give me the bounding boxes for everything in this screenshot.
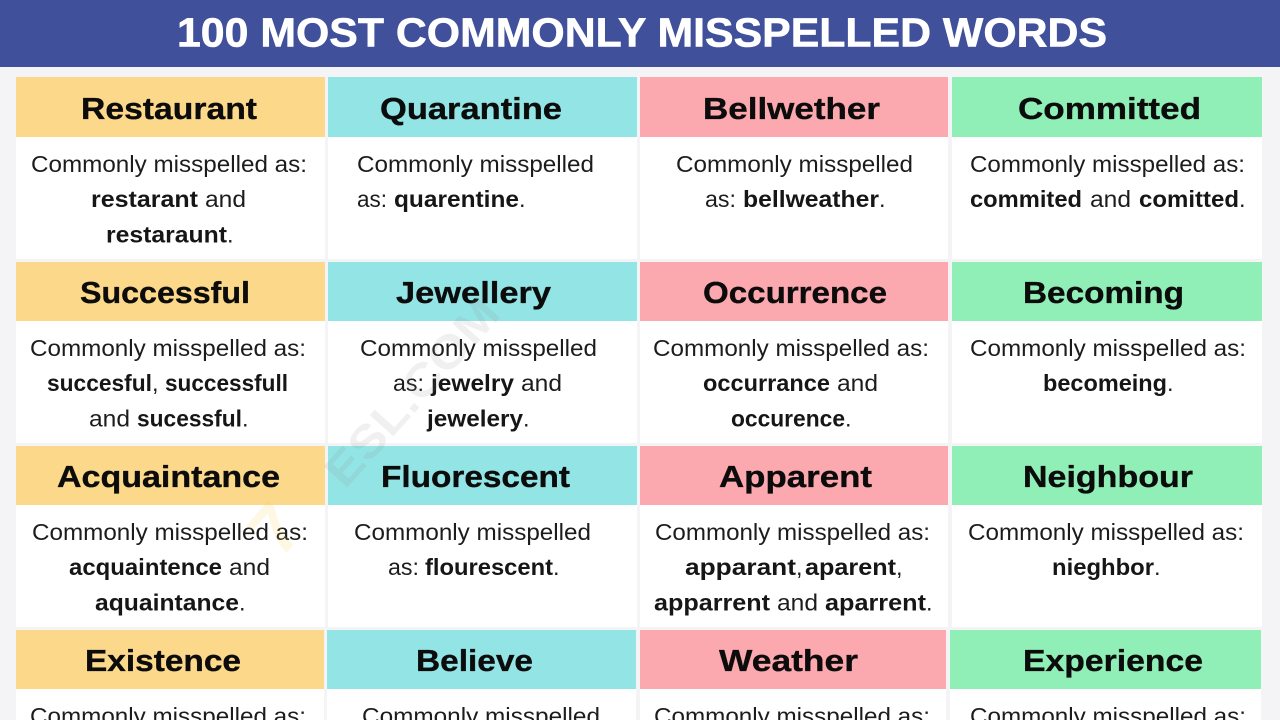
text: Apparent misspellings: . xyxy=(926,590,933,616)
text: Apparent misspellings: aparent xyxy=(805,554,896,580)
text: Bellwether misspellings xyxy=(676,151,913,212)
card: Apparent xyxy=(640,446,948,627)
text: Successful misspellings: successfull xyxy=(165,370,288,396)
text: Successful misspellings: sucessful xyxy=(137,406,242,432)
text: Neighbour misspellings: Commonly misspelled as: xyxy=(968,519,1244,545)
text: Successful misspellings: succesful xyxy=(47,370,152,396)
text: Successful misspellings: and xyxy=(89,406,130,432)
text: Quarantine misspellings xyxy=(357,151,594,212)
text: Quarantine misspellings: . xyxy=(519,186,526,212)
text: Successful misspellings: . xyxy=(242,406,249,432)
text: Neighbour misspellings xyxy=(968,519,1244,580)
text: Quarantine misspellings: Commonly misspelled xyxy=(357,151,594,177)
text: Jewellery misspellings: and xyxy=(521,370,562,396)
text: Committed misspellings: . xyxy=(1239,186,1246,212)
text: Fluorescent misspellings: as: xyxy=(388,554,419,580)
text: Apparent misspellings xyxy=(654,519,933,616)
text: Occurrence misspellings xyxy=(653,335,929,432)
text: Committed misspellings xyxy=(970,151,1246,212)
text: Acquaintance misspellings xyxy=(32,519,308,616)
heading: Successful: Successful xyxy=(80,275,250,310)
text: Acquaintance misspellings: acquaintence xyxy=(69,554,222,580)
text: Quarantine misspellings: quarentine xyxy=(394,186,519,212)
text: Successful misspellings xyxy=(30,335,306,432)
watermark xyxy=(233,287,510,570)
text: Acquaintance misspellings: aquaintance xyxy=(95,590,239,616)
heading: Becoming: Becoming xyxy=(1023,275,1184,310)
text: Neighbour misspellings: nieghbor xyxy=(1052,554,1154,580)
heading: Fluorescent: Fluorescent xyxy=(381,459,570,494)
text: Becoming misspellings: Commonly misspelled as: xyxy=(970,335,1246,361)
text: Restaurant misspellings: and xyxy=(205,186,246,212)
text: Restaurant misspellings: Commonly misspelled as: xyxy=(31,151,307,177)
card: Successful xyxy=(16,262,325,443)
text: Committed misspellings: and xyxy=(1090,186,1131,212)
title banner xyxy=(0,0,1280,67)
text: Occurrence misspellings: Commonly misspelled as: xyxy=(653,335,929,361)
card: Jewellery xyxy=(328,262,637,443)
card: Experience xyxy=(950,630,1261,720)
heading: Weather: Weather xyxy=(719,643,858,678)
text: Acquaintance misspellings: Commonly misspelled as: xyxy=(32,519,308,545)
text: Bellwether misspellings: Commonly misspelled xyxy=(676,151,913,177)
text: Apparent misspellings: apparrent xyxy=(654,590,770,616)
heading: Apparent: Apparent xyxy=(719,459,872,494)
text: Acquaintance misspellings: . xyxy=(239,590,246,616)
text: Jewellery misspellings xyxy=(360,335,597,432)
text: Occurrence misspellings: occurence xyxy=(731,406,845,432)
text: Occurrence misspellings: and xyxy=(837,370,878,396)
heading: Existence: Existence xyxy=(85,643,241,678)
watermark: 7 xyxy=(233,489,317,570)
card: Becoming xyxy=(952,262,1262,443)
text: Apparent misspellings: apparant xyxy=(685,554,796,580)
text: Committed misspellings: commited xyxy=(970,186,1082,212)
text: Restaurant misspellings xyxy=(31,151,307,248)
card: Weather xyxy=(640,630,946,720)
card: Fluorescent xyxy=(328,446,637,627)
heading: Neighbour: Neighbour xyxy=(1023,459,1193,494)
card: Acquaintance xyxy=(16,446,325,627)
card: Believe xyxy=(327,630,636,720)
card: Quarantine xyxy=(328,77,637,259)
text: Jewellery misspellings: jewelry xyxy=(430,370,514,396)
text: Fluorescent misspellings xyxy=(354,519,591,580)
card: Committed xyxy=(952,77,1262,259)
text: Becoming misspellings xyxy=(970,335,1246,396)
text: Becoming misspellings: becomeing xyxy=(1043,370,1167,396)
text: Jewellery misspellings: . xyxy=(523,406,530,432)
text: Fluorescent misspellings: . xyxy=(553,554,560,580)
text: Apparent misspellings: and xyxy=(777,590,818,616)
card: Neighbour xyxy=(952,446,1262,627)
text: Bellwether misspellings: bellweather xyxy=(743,186,879,212)
text: Occurrence misspellings: . xyxy=(845,406,852,432)
text: Occurrence misspellings: occurrance xyxy=(703,370,830,396)
heading: Jewellery: Jewellery xyxy=(396,275,552,310)
text: Apparent misspellings: Commonly misspelled as: xyxy=(655,519,930,545)
heading: Committed: Committed xyxy=(1018,91,1201,126)
text: Becoming misspellings: . xyxy=(1167,370,1174,396)
text: Quarantine misspellings: as: xyxy=(357,186,387,212)
heading: Restaurant: Restaurant xyxy=(81,91,257,126)
card: Bellwether xyxy=(640,77,948,259)
heading: Believe: Believe xyxy=(416,643,533,678)
card: Occurrence xyxy=(640,262,948,443)
heading: Acquaintance: Acquaintance xyxy=(57,459,280,494)
text: Jewellery misspellings: Commonly misspelled xyxy=(360,335,597,361)
text: Apparent misspellings: , xyxy=(896,554,903,580)
text: Acquaintance misspellings: and xyxy=(229,554,270,580)
heading: Quarantine: Quarantine xyxy=(380,91,562,126)
text: Neighbour misspellings: . xyxy=(1154,554,1161,580)
card: Restaurant xyxy=(16,77,325,259)
text: Restaurant misspellings: restaraunt xyxy=(106,222,227,248)
text: Restaurant misspellings: restarant xyxy=(91,186,198,212)
text: Apparent misspellings: aparrent xyxy=(825,590,926,616)
text: Committed misspellings: comitted xyxy=(1139,186,1239,212)
text: Successful misspellings: Commonly misspelled as: xyxy=(30,335,306,361)
text: Successful misspellings: , xyxy=(152,370,159,396)
title: 100 MOST COMMONLY MISSPELLED WORDS xyxy=(177,10,1107,56)
text: Jewellery misspellings: jewelery xyxy=(426,406,523,432)
text: Restaurant misspellings: . xyxy=(227,222,234,248)
card: Existence xyxy=(16,630,324,720)
text: Fluorescent misspellings: flourescent xyxy=(425,554,553,580)
text: Fluorescent misspellings: Commonly misspelled xyxy=(354,519,591,545)
text: Bellwether misspellings: as: xyxy=(705,186,736,212)
text: Bellwether misspellings: . xyxy=(879,186,886,212)
text: Committed misspellings: Commonly misspelled as: xyxy=(970,151,1245,177)
heading: Experience: Experience xyxy=(1023,643,1203,678)
text: Jewellery misspellings: as: xyxy=(393,370,424,396)
watermark: ESL.COM xyxy=(314,287,510,497)
heading: Bellwether: Bellwether xyxy=(703,91,880,126)
text: Apparent misspellings: , xyxy=(796,554,803,580)
heading: Occurrence: Occurrence xyxy=(703,275,887,310)
